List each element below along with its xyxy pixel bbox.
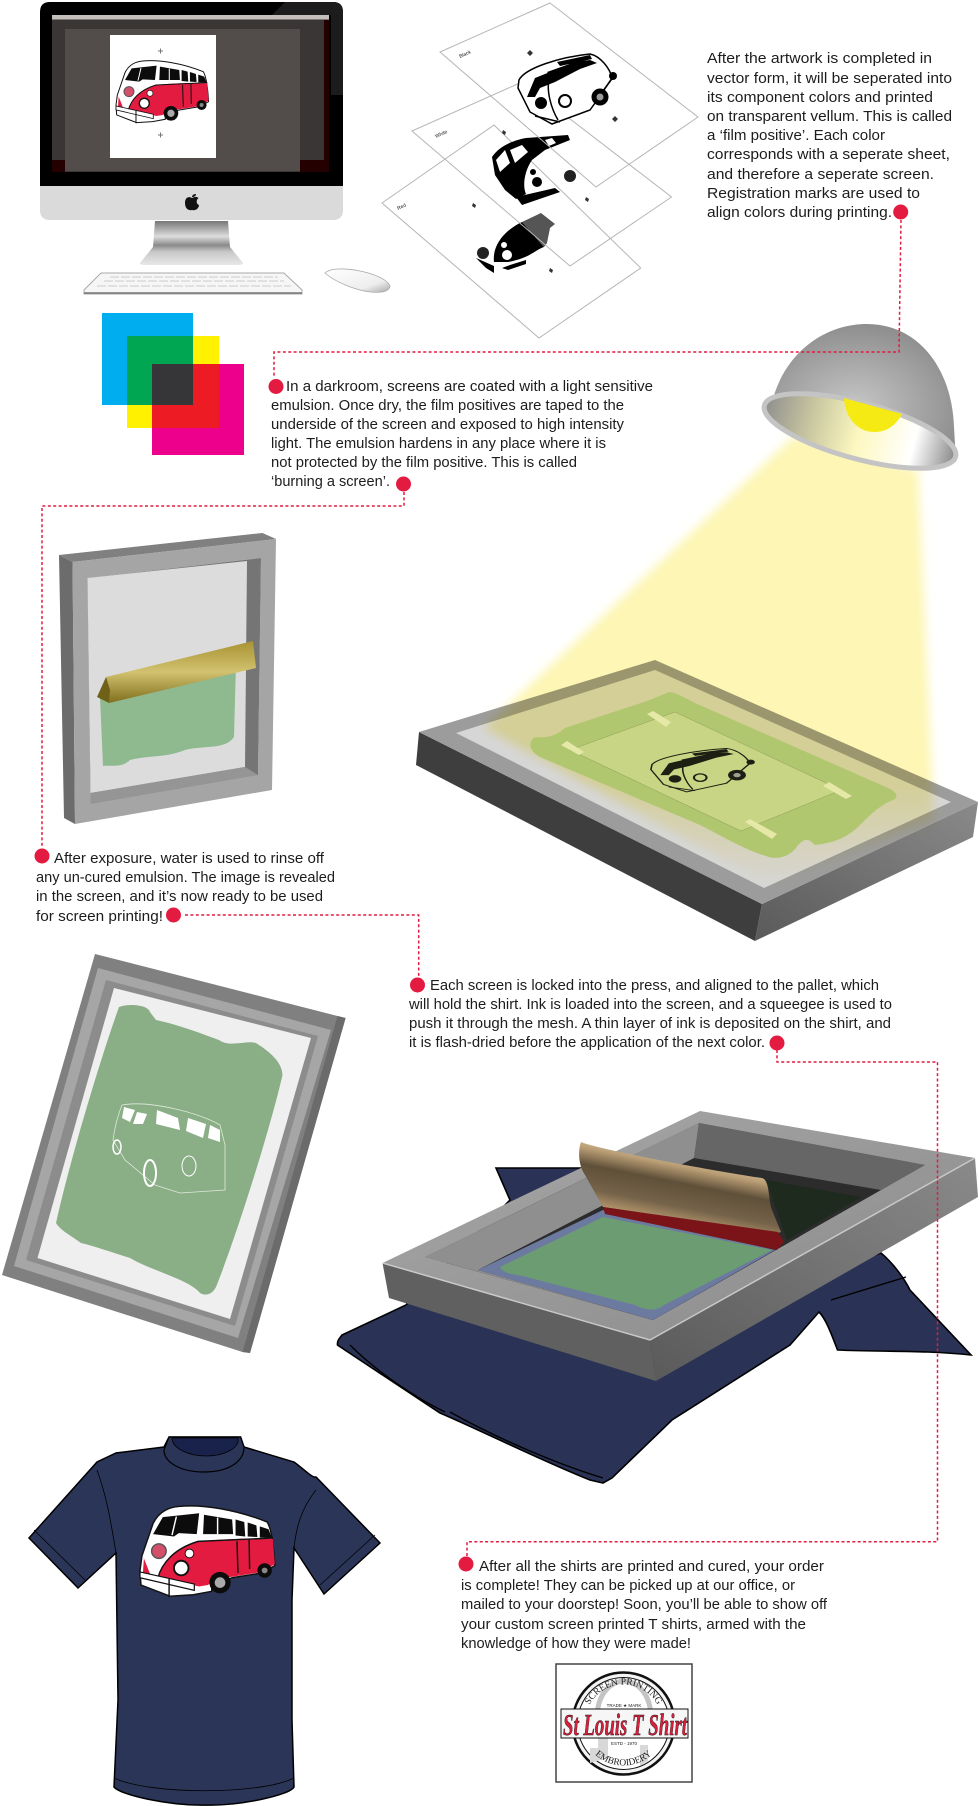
printed van bbox=[140, 1506, 275, 1597]
step 5 text bbox=[461, 1559, 828, 1652]
CMYK overlapping squares bbox=[102, 313, 244, 455]
step 4 text bbox=[408, 978, 892, 1051]
mesh bbox=[88, 561, 247, 793]
final printed t-shirt bbox=[29, 1437, 380, 1805]
step 4 text: Each screen is locked into the press, and aligned to the pallet, which bbox=[430, 978, 879, 994]
dotted connector 3 to 4 bbox=[185, 915, 419, 977]
company logo: SCREEN PRINTING bbox=[585, 1678, 662, 1704]
step 1 text: After the artwork is completed in bbox=[707, 51, 932, 67]
interior right wall bbox=[694, 1123, 925, 1190]
black film sheet: Black bbox=[458, 49, 472, 60]
step 3 text: any un-cured emulsion. The image is revealed bbox=[36, 870, 335, 886]
lamp bbox=[757, 324, 963, 484]
step 3 text: in the screen, and it’s now ready to be used bbox=[36, 889, 323, 905]
mesh blue bbox=[478, 1210, 775, 1320]
step 5 text: is complete! They can be picked up at our office, or bbox=[461, 1578, 795, 1594]
screen mesh bbox=[456, 670, 951, 888]
keyboard bbox=[84, 273, 302, 294]
step markers bbox=[34, 204, 908, 1572]
mesh white bbox=[38, 988, 311, 1319]
dotted connector 2 to 3 bbox=[42, 492, 404, 848]
company logo bbox=[555, 1663, 693, 1783]
monitor display bbox=[40, 2, 343, 186]
step 5 text: knowledge of how they were made! bbox=[461, 1636, 691, 1652]
step 2 text: not protected by the film positive. This is called bbox=[271, 455, 577, 471]
step 2 text bbox=[271, 379, 653, 490]
white film sheet: White bbox=[434, 129, 449, 140]
step 1 text bbox=[707, 51, 952, 221]
step 3 text bbox=[36, 851, 335, 925]
step 3: rinsing screen bbox=[59, 533, 276, 824]
squeegee rubber bbox=[603, 1207, 784, 1250]
step 1 text: vector form, it will be seperated into bbox=[707, 71, 952, 87]
step 2 text: In a darkroom, screens are coated with a light sensitive bbox=[286, 379, 653, 395]
press frame right face bbox=[650, 1158, 978, 1381]
inner frame walls bbox=[88, 558, 261, 804]
inner ring bbox=[26, 980, 318, 1326]
dotted connector 4 to 5 bbox=[467, 1050, 938, 1557]
shirt under press bbox=[337, 1168, 971, 1483]
printed green area bbox=[500, 1217, 772, 1310]
press frame top bbox=[382, 1111, 975, 1340]
light beam bbox=[484, 435, 934, 885]
printing press with shirt bbox=[337, 1111, 978, 1483]
step 1 text: its component colors and printed bbox=[707, 90, 933, 106]
step 1 text: a ‘film positive’. Each color bbox=[707, 128, 885, 144]
frame outer bbox=[2, 954, 346, 1353]
emulsion with image bbox=[56, 1005, 282, 1295]
step 4 text: it is flash-dried before the application of the next color. bbox=[409, 1035, 765, 1051]
panel: film positive sheets bbox=[382, 3, 698, 338]
frame faces bbox=[59, 533, 276, 562]
neck opening bbox=[172, 1438, 238, 1456]
frame left side bbox=[59, 555, 75, 824]
frame front bbox=[72, 539, 276, 824]
emulsion being applied bbox=[100, 662, 236, 766]
step 3 text: for screen printing! bbox=[36, 909, 163, 925]
screen frame top bbox=[419, 660, 978, 904]
step 2 text: light. The emulsion hardens in any place where it is bbox=[271, 436, 606, 452]
company logo: ESTD - 1970 bbox=[611, 1741, 638, 1746]
step 2 text: ‘burning a screen’. bbox=[271, 474, 390, 490]
shirt fold lines bbox=[350, 1277, 906, 1478]
frame side bbox=[242, 1016, 346, 1353]
interior left wall bbox=[425, 1123, 699, 1320]
step 5 text: your custom screen printed T shirts, armed with the bbox=[461, 1617, 806, 1633]
monitor chin with logo bbox=[40, 186, 343, 220]
step 1 text: on transparent vellum. This is called bbox=[707, 109, 952, 125]
scoop coater bbox=[97, 641, 256, 703]
frame face bbox=[14, 968, 331, 1338]
finished screen bbox=[2, 954, 346, 1353]
company logo: TRADE ★ MARK bbox=[607, 1703, 641, 1708]
press frame left face bbox=[382, 1263, 656, 1381]
step 3 text: After exposure, water is used to rinse off bbox=[54, 851, 325, 867]
dotted connector 1 to 2 bbox=[274, 220, 901, 378]
film positive bbox=[561, 711, 852, 839]
exposure screen on table bbox=[416, 435, 978, 941]
step 5 text: mailed to your doorstep! Soon, you’ll be able to show off bbox=[461, 1597, 828, 1613]
step 2 text: emulsion. Once dry, the film positives are taped to the bbox=[271, 398, 624, 414]
bulb bbox=[844, 398, 902, 432]
sleeve seams bbox=[34, 1470, 375, 1791]
bottom ledge bbox=[90, 767, 258, 804]
screen left side bbox=[416, 732, 762, 941]
step 1 text: corresponds with a seperate sheet, bbox=[707, 147, 950, 163]
step 4 text: push it through the mesh. A thin layer of ink is deposited on the shirt, and bbox=[409, 1016, 891, 1032]
step 5 text: After all the shirts are printed and cured, your order bbox=[479, 1559, 824, 1575]
company logo: St Louis T Shirt bbox=[563, 1707, 688, 1742]
step 1 text: and therefore a seperate screen. bbox=[707, 167, 934, 183]
screen right side bbox=[755, 802, 978, 941]
emulsion bbox=[530, 692, 896, 858]
white film sheet bbox=[412, 82, 672, 266]
black film sheet bbox=[440, 3, 698, 187]
squeegee handle bbox=[579, 1142, 781, 1233]
step 4 text: will hold the shirt. Ink is loaded into the screen, and a squeegee is used to bbox=[408, 997, 892, 1013]
red film sheet bbox=[382, 125, 641, 338]
step 1 text: align colors during printing. bbox=[707, 205, 892, 221]
red film sheet: Red bbox=[396, 203, 407, 212]
company logo: EMBROIDERY bbox=[595, 1750, 650, 1766]
panel: computer with artwork bbox=[40, 2, 390, 294]
step 2 text: underside of the screen and exposed to high intensity bbox=[271, 417, 625, 433]
collar bbox=[164, 1437, 244, 1472]
mouse bbox=[325, 269, 390, 292]
frame highlight bbox=[382, 1158, 975, 1340]
press interior bbox=[425, 1123, 925, 1320]
monitor stand bbox=[140, 221, 243, 265]
dark ink side bbox=[766, 1180, 862, 1240]
step 1 text: Registration marks are used to bbox=[707, 186, 920, 202]
